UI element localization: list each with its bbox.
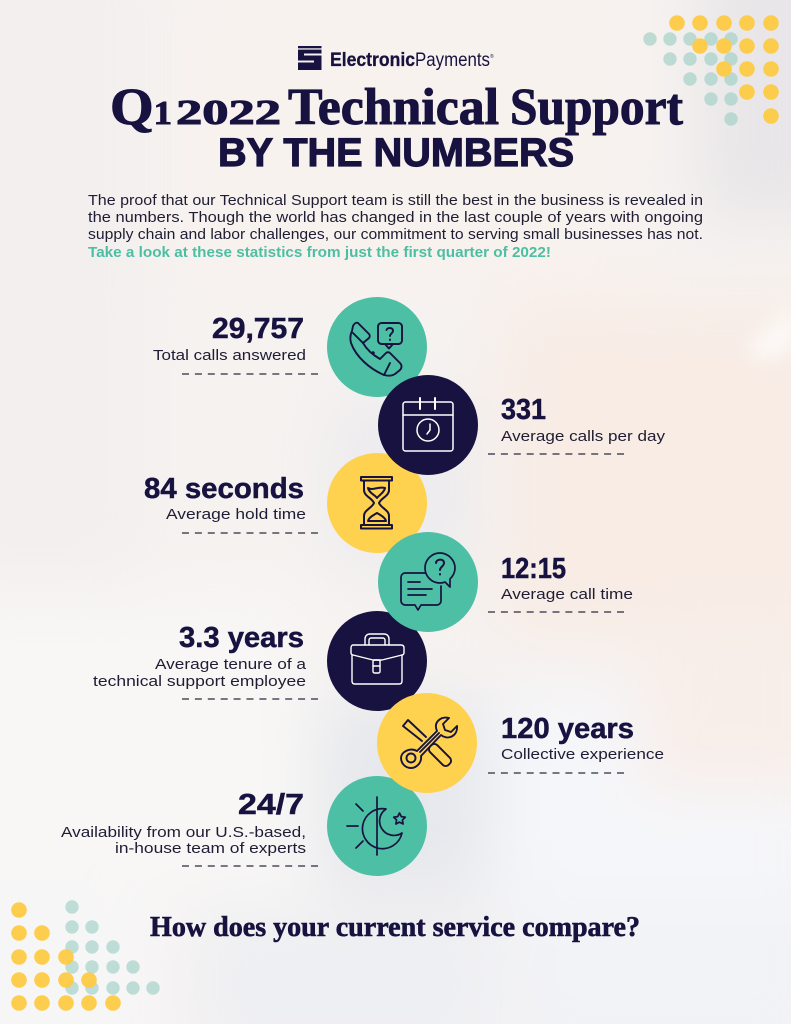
- intro paragraph: [88, 192, 703, 261]
- title: Technical: [288, 79, 499, 136]
- icon: logo mark: [298, 46, 322, 70]
- stat: hold time: Average hold time: [166, 506, 306, 523]
- circle: moon and sun: [327, 776, 427, 876]
- stat: calls per day: 331: [501, 394, 546, 426]
- title: 2022: [176, 93, 281, 132]
- stat: availability: [61, 789, 320, 866]
- circle: briefcase: [327, 611, 427, 711]
- stat: tenure: technical support employee: [93, 673, 306, 690]
- subtitle: BY THE NUMBERS: [218, 131, 574, 175]
- stat: call time: Average call time: [501, 586, 633, 603]
- closing question: How does your current service compare?: [150, 912, 640, 943]
- stat: tenure: 3.3 years: [179, 622, 304, 654]
- icon: chat question: [401, 553, 455, 610]
- logo wordmark: ®: [490, 53, 494, 60]
- logo wordmark: Payments: [415, 50, 490, 71]
- stat: hold time: [144, 473, 320, 533]
- stat: availability: Availability from our U.S.-based,: [61, 824, 306, 841]
- stat: tenure: [93, 622, 320, 699]
- decorative dots: top right: [643, 15, 779, 126]
- logo wordmark: [330, 50, 494, 71]
- icon: briefcase: [351, 634, 404, 684]
- stat: hold time: 84 seconds: [144, 473, 304, 505]
- title: Support: [510, 79, 684, 136]
- stat: total calls: 29,757: [212, 313, 304, 345]
- circle: chat: [378, 532, 478, 632]
- circle: calendar: [378, 375, 478, 475]
- decorative dots: bottom left: [11, 900, 160, 1011]
- logo wordmark: Electronic: [330, 50, 415, 71]
- circle: phone: [327, 297, 427, 397]
- icon: day and night: [347, 797, 405, 855]
- stat: experience: 120 years: [501, 713, 634, 745]
- stat: experience: [488, 713, 664, 773]
- stat: call time: 12:15: [501, 553, 566, 585]
- stat: calls per day: Average calls per day: [501, 428, 666, 445]
- title: Q1: [110, 79, 172, 136]
- icon: hourglass: [361, 477, 392, 528]
- icon: calendar clock: [403, 398, 453, 451]
- logo: [298, 46, 494, 71]
- intro paragraph: The proof that our Technical Support team is still the best in the business is revealed in: [88, 192, 703, 209]
- stat: total calls: [153, 313, 320, 374]
- intro paragraph: supply chain and labor challenges, our commitment to serving small businesses has not.: [88, 226, 703, 243]
- stat: experience: Collective experience: [501, 746, 664, 763]
- stat: availability: in-house team of experts: [115, 840, 306, 857]
- intro highlight: Take a look at these statistics from just the first quarter of 2022!: [88, 244, 551, 261]
- intro paragraph: the numbers. Though the world has changed in the last couple of years with ongoing: [88, 209, 703, 226]
- circle: tools: [377, 693, 477, 793]
- title: [110, 79, 684, 136]
- icon: phone with question: [350, 323, 402, 376]
- stat: tenure: Average tenure of a: [155, 656, 307, 673]
- stat: calls per day: [488, 394, 666, 454]
- circle: hourglass: [327, 453, 427, 553]
- stat: call time: [488, 553, 633, 612]
- icon: wrench and screwdriver: [401, 718, 457, 768]
- stat: total calls: Total calls answered: [153, 347, 306, 364]
- stat: availability: 24/7: [238, 789, 304, 821]
